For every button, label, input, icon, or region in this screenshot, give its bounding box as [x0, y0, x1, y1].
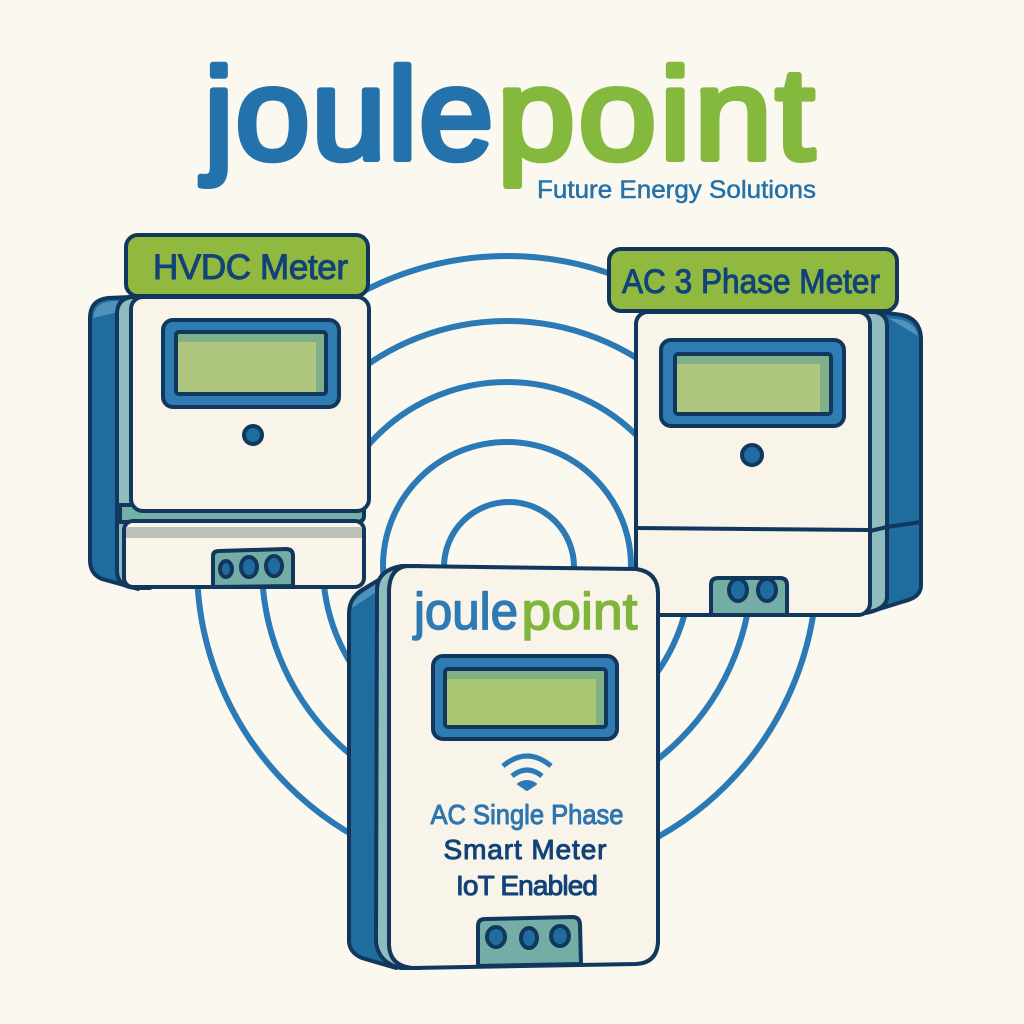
screen	[433, 656, 617, 739]
label: AC 3 Phase Meter	[609, 249, 897, 311]
device text: IoT Enabled	[456, 870, 598, 901]
label: HVDC Meter	[126, 235, 368, 296]
terminal block	[711, 578, 787, 615]
device logo: joule	[412, 583, 518, 641]
device text: Smart Meter	[444, 834, 606, 865]
icon: wifi	[503, 756, 551, 790]
device logo: point	[522, 583, 638, 641]
meter: AC 3 Phase	[636, 312, 921, 615]
logo: joulepoint	[200, 42, 815, 187]
device logo	[412, 583, 638, 641]
tagline: Future Energy Solutions	[537, 176, 816, 204]
logo: joulepoint: point	[497, 42, 815, 187]
terminal block	[213, 549, 293, 587]
signal rings	[197, 256, 817, 876]
terminal block	[478, 917, 581, 966]
indicator	[244, 426, 262, 444]
device text	[430, 799, 624, 901]
label: AC 3 Phase Meter: AC 3 Phase Meter	[622, 263, 880, 301]
device text: AC Single Phase	[430, 799, 624, 830]
screen	[163, 320, 339, 407]
indicator	[742, 445, 762, 465]
label: HVDC Meter: HVDC Meter	[153, 248, 348, 287]
logo: joulepoint: joule	[200, 42, 493, 187]
meter: AC Single Phase	[349, 566, 658, 968]
meter: HVDC	[90, 297, 369, 589]
screen	[661, 340, 844, 426]
